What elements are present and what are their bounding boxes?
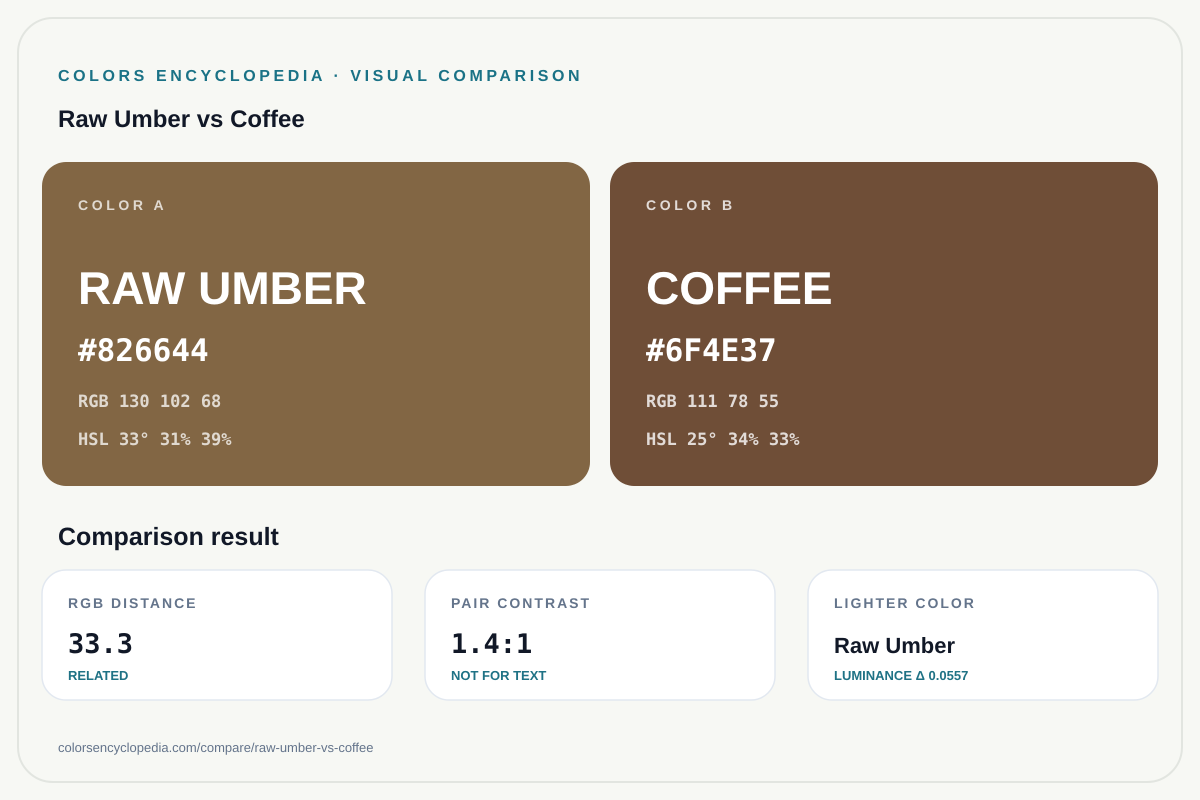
- color B HSL: HSL 25° 34% 33%: [646, 430, 800, 450]
- panel: color A swatch: [42, 162, 590, 486]
- lighter color note: LUMINANCE Δ 0.0557: [834, 668, 968, 683]
- footer URL: colorsencyclopedia.com/compare/raw-umber-vs-coffee: [58, 740, 374, 755]
- section heading: Comparison result: [58, 523, 279, 551]
- pair contrast value: 1.4:1: [451, 629, 532, 660]
- pair contrast label: PAIR CONTRAST: [451, 595, 591, 611]
- pair contrast note: NOT FOR TEXT: [451, 668, 546, 683]
- color A name: RAW UMBER: [78, 262, 367, 314]
- color B name: COFFEE: [646, 262, 833, 314]
- color B hex: #6F4E37: [646, 333, 777, 369]
- RGB distance label: RGB DISTANCE: [68, 595, 198, 611]
- RGB distance note: RELATED: [68, 668, 128, 683]
- color B label: COLOR B: [646, 197, 736, 213]
- RGB distance value: 33.3: [68, 629, 133, 660]
- eyebrow heading: COLORS ENCYCLOPEDIA · VISUAL COMPARISON: [58, 68, 583, 84]
- color B RGB: RGB 111 78 55: [646, 392, 779, 412]
- color A RGB: RGB 130 102 68: [78, 392, 221, 412]
- color A label: COLOR A: [78, 197, 167, 213]
- lighter color value: Raw Umber: [834, 633, 955, 658]
- title: Raw Umber vs Coffee: [58, 106, 305, 133]
- color A HSL: HSL 33° 31% 39%: [78, 430, 232, 450]
- panel: color B swatch: [610, 162, 1158, 486]
- color A hex: #826644: [78, 333, 209, 369]
- panel: lighter color card: [808, 570, 1158, 700]
- panel: pair contrast card: [425, 570, 775, 700]
- lighter color label: LIGHTER COLOR: [834, 595, 976, 611]
- panel: RGB distance card: [42, 570, 392, 700]
